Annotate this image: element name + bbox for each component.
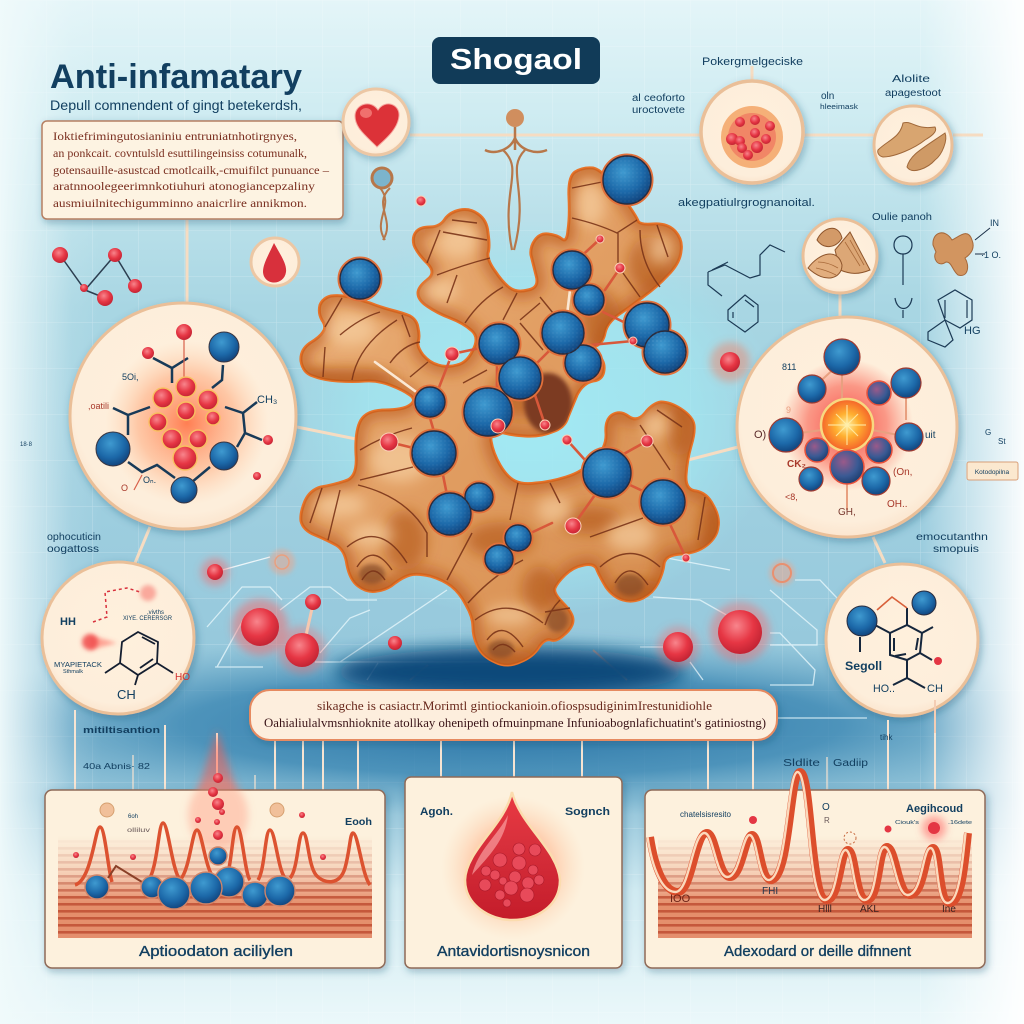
red glow in panel <box>188 779 248 851</box>
labels: Segoll <box>845 659 882 673</box>
panel: peak chart <box>645 772 985 968</box>
dark inner lobe <box>524 373 572 433</box>
panel caption: Adexodard or deille difnnent <box>724 943 912 960</box>
label: hleeimask: hleeimask <box>820 104 859 111</box>
label: Abnis: 40a Abnis· 82 <box>83 761 150 771</box>
labels: 811 <box>782 362 796 372</box>
icon: blood drop <box>251 238 299 286</box>
label: St: St <box>998 437 1006 446</box>
panel: lower-left circle: MYAPIETACK <box>54 662 102 669</box>
panel: lower-left circle: Sthmalk <box>63 669 84 675</box>
red dashed path <box>93 588 140 622</box>
panel: peak chart: Ciouk's <box>895 820 920 826</box>
text banner: sikagche is casiactr.Morimtl gintiockanioin.ofiospsudiginimIrestunidiohle <box>317 698 712 713</box>
drop glow <box>441 796 585 940</box>
label: HO: ·1 O. <box>981 250 1001 260</box>
panel: right molecule circle: (On, <box>893 467 912 478</box>
panel: peak chart: IOO <box>670 893 691 905</box>
hexagon <box>105 632 173 685</box>
panel: peak chart: Hlll <box>818 904 832 915</box>
molecule bonds on ginger <box>375 239 686 558</box>
red atoms on ginger <box>380 196 690 562</box>
panel: right molecule circle: O) <box>754 429 766 441</box>
panel: lower-right circle <box>826 564 978 716</box>
label: smopuis: smopuis <box>933 544 979 555</box>
peak curve outer <box>650 772 968 903</box>
title badge: Shogaol <box>432 37 600 84</box>
icon: small ginger <box>933 228 990 275</box>
panel: lower-left circle: ,vivths <box>147 610 164 616</box>
label: apagestoot: apagestoot <box>885 88 941 99</box>
ginger body <box>301 168 718 665</box>
label: Pokergmelgeciske: Pokergmelgeciske <box>702 56 803 68</box>
stripe field <box>58 836 372 938</box>
intro text callout: Ioktiefrimingutosianiniu entruniatnhotirgnyes, <box>53 129 297 143</box>
icon: small red molecule <box>52 247 142 306</box>
panel: peak chart: R <box>824 816 830 825</box>
label: molecule notes: IN <box>990 218 999 228</box>
panel: lower-right circle: CH <box>927 683 943 695</box>
intro text callout: aratnnoolegeerimnkotiuhuri atonogiancepzaliny <box>53 179 315 193</box>
panel: blood drop: Sognch <box>565 806 610 818</box>
panel: antioxidant activity chart: olliluv <box>127 828 150 834</box>
label: Sldlite: Sldlite <box>783 758 821 769</box>
panel: top-right red cluster circle <box>701 81 803 183</box>
panel: right molecule circle <box>737 317 957 537</box>
label: uroctovete: uroctovete <box>632 105 685 116</box>
pointer below lower-right circle <box>934 700 936 733</box>
central ginger root <box>295 168 726 670</box>
purple atoms <box>805 381 892 484</box>
floating red atoms <box>201 342 795 674</box>
vertical connectors to panels <box>75 710 935 855</box>
text banner <box>250 690 777 740</box>
sun rays <box>828 405 866 445</box>
labels: HH <box>60 616 76 628</box>
label: emocutanthn: emocutanthn <box>916 532 988 543</box>
floor platform lines <box>207 557 867 718</box>
blue atoms <box>847 591 936 636</box>
panel: antioxidant activity chart <box>45 773 385 968</box>
panel: lower-left circle: CH <box>117 687 136 702</box>
connector lines from central molecule <box>135 66 983 563</box>
chemical structures right <box>708 236 972 347</box>
panel caption: Antavidortisnoysnicon <box>437 943 590 960</box>
stripe field <box>658 836 972 938</box>
peaks <box>75 823 370 885</box>
label: tihk: tihk <box>880 733 893 742</box>
panel: antioxidant activity chart: 6oh <box>128 814 138 820</box>
label: ophocuticin: ophocuticin <box>47 532 101 543</box>
panel: left molecule circle <box>70 303 296 529</box>
labels: 5Oi, <box>122 372 139 382</box>
panel: peak chart: FHI <box>762 886 778 897</box>
label: Gadiip: Gadiip <box>833 758 869 769</box>
ginger ground shadow <box>335 648 685 696</box>
label: oln: oln <box>821 91 834 102</box>
falling red drops <box>73 773 326 860</box>
icon: caduceus <box>485 109 547 250</box>
ginger skin rings <box>310 182 705 652</box>
panel: peak chart: O <box>822 802 830 813</box>
text banner: Oahialiulalvmsnhioknite atollkay ohenipeth ofmuinpmane Infunioabognlafichuatint's gatiniostng) <box>264 715 766 730</box>
heading: Anti-infamatary <box>50 58 302 96</box>
panel: peak chart: Ine <box>942 904 956 915</box>
blue atoms on ginger <box>340 156 686 573</box>
panel: peak chart: Aegihcoud <box>906 803 963 815</box>
subheading: Depull comnendent of gingt betekerdsh, <box>50 98 302 113</box>
label: akegpatiulrgrognanoital: akegpatiulrgrognanoital. <box>678 197 815 209</box>
panel: lower-left circle <box>42 562 194 714</box>
panel: blood drop <box>405 777 622 968</box>
panel: right molecule circle: GH, <box>838 507 856 518</box>
label: left axis note: 18·8 <box>20 442 33 448</box>
tag: Kotodopilna: Kotodopilna <box>975 469 1010 476</box>
label: Alolite: Alolite <box>892 74 931 85</box>
label: al ceoforto: al ceoforto <box>632 93 685 104</box>
label: Oulie panoh: Oulie panoh <box>872 212 932 223</box>
panel caption: Aptioodaton aciliylen <box>139 943 293 960</box>
blood drop <box>465 792 560 920</box>
icon: ring helix <box>372 168 392 240</box>
label: HG: HG <box>964 325 980 337</box>
red cells <box>479 843 544 907</box>
panel: peak chart: .16dete <box>948 820 972 826</box>
bonds <box>113 358 262 482</box>
tag: Kotodopilna <box>967 462 1018 480</box>
intro text callout: an ponkcait. covntulsld esuttilingeinsiss cotumunalk, <box>53 146 307 160</box>
hexagon <box>860 608 933 688</box>
panel: sliced ginger circle <box>803 219 877 293</box>
knob ends <box>359 564 644 658</box>
label: side note right: G <box>985 428 991 437</box>
peach pointer lines <box>410 650 627 680</box>
label: oogattoss: oogattoss <box>47 544 99 555</box>
drop highlight <box>472 815 508 875</box>
panel: right molecule circle: CK₂ <box>787 459 806 470</box>
panel: left molecule circle: O <box>121 483 128 493</box>
blue spheres <box>85 847 295 909</box>
ginger shading <box>295 168 726 670</box>
panel: right molecule circle: OH.. <box>887 499 908 510</box>
intro text callout <box>42 121 343 219</box>
panel: lower-right circle: HO.. <box>873 683 895 695</box>
panel: peak chart: AKL <box>860 904 879 915</box>
blue atoms <box>96 332 239 503</box>
red cluster <box>149 377 220 470</box>
panel: right molecule circle: 9 <box>786 405 791 415</box>
intro text callout: ausmiuilnitechigumminno anaicrlire annikmon. <box>53 196 307 210</box>
blue atoms <box>769 339 923 495</box>
vertical connector glow <box>195 730 240 830</box>
title badge: Shogaol: Shogaol <box>450 44 582 76</box>
panel: right molecule circle: <8, <box>785 492 798 502</box>
panel: left molecule circle: ,oatili <box>88 401 109 411</box>
label: natiltisantion: mitiltisantion <box>83 725 160 735</box>
panel: left molecule circle: CH₃ <box>257 394 277 406</box>
panel: lower-left circle: XIYE. CERERSGR <box>123 616 173 622</box>
icon: heart <box>343 89 409 155</box>
panel: lower-left circle: HO <box>175 672 190 683</box>
small labels: Eooh <box>345 817 372 828</box>
panel: right molecule circle: uit <box>925 430 936 441</box>
red atoms <box>142 324 273 480</box>
intro text callout: gotensauille-asustcad cmotlcailk,-cmuifilct punuance – <box>53 163 330 177</box>
sun core <box>821 399 873 451</box>
peak curve inner <box>648 772 966 903</box>
labels: chatelsisresito <box>680 810 732 819</box>
panel: left molecule circle: Oₙ. <box>143 475 156 485</box>
panel: top-right ginger circle <box>874 106 952 184</box>
labels: Agoh. <box>420 806 453 818</box>
